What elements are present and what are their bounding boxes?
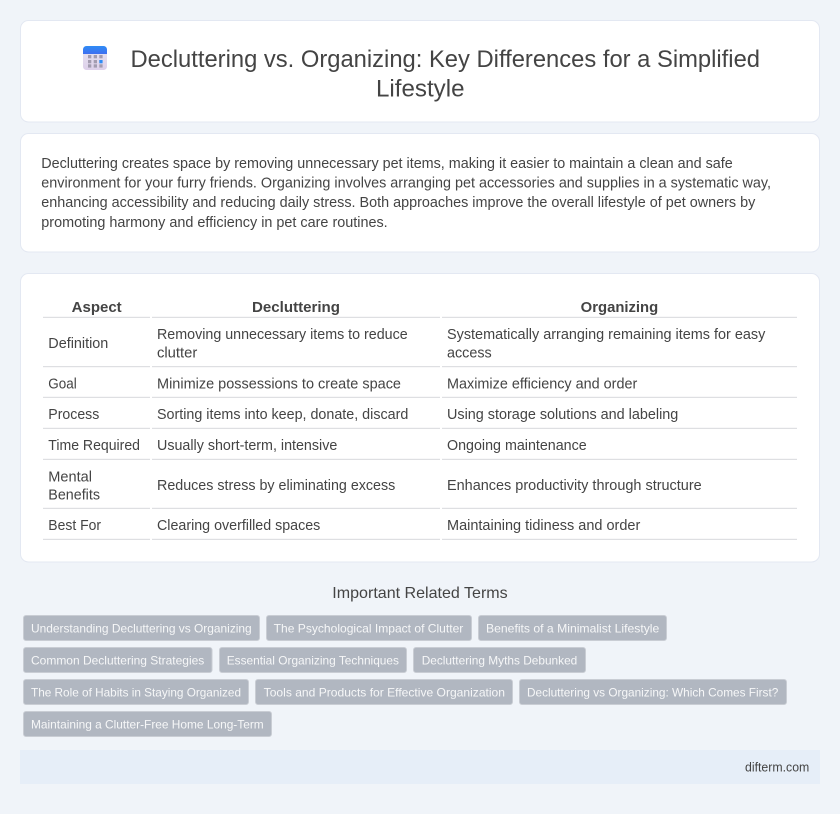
heading: important related terms: Important Related Terms <box>332 585 508 602</box>
row: best for <box>48 518 640 534</box>
tag: The Role of Habits in Staying Organized <box>31 685 241 699</box>
row: time required: Ongoing maintenance <box>447 438 587 454</box>
row: process: Using storage solutions and labeling <box>447 407 678 423</box>
panel: comparison table <box>20 274 820 562</box>
tag <box>24 648 212 672</box>
row: time required: Usually short-term, intensive <box>157 438 337 454</box>
row: definition: Systematically arranging remaining items for easy <box>447 327 766 343</box>
tag: Understanding Decluttering vs Organizing <box>31 621 252 635</box>
row: process <box>48 407 678 423</box>
row: mental benefits: Benefits <box>48 487 100 503</box>
tag <box>256 680 512 704</box>
text block: summary: promoting harmony and efficiency in pet care routines. <box>41 215 388 231</box>
tag: Benefits of a Minimalist Lifestyle <box>486 621 660 635</box>
row: definition: access <box>447 345 492 361</box>
row: goal: Maximize efficiency and order <box>447 376 638 392</box>
row: definition: Definition <box>48 336 108 352</box>
row: mental benefits: Reduces stress by eliminating excess <box>157 478 395 494</box>
table header row <box>72 300 658 316</box>
tag <box>520 680 786 704</box>
table header row: Aspect <box>72 300 122 316</box>
tag: Decluttering vs Organizing: Which Comes First? <box>527 685 779 699</box>
table header row: Organizing <box>581 300 658 316</box>
tag <box>220 648 406 672</box>
row: definition: clutter <box>157 345 197 361</box>
text block: summary <box>41 156 771 231</box>
title: Lifestyle <box>376 76 464 102</box>
row: mental benefits: Mental <box>48 469 92 485</box>
tag: Essential Organizing Techniques <box>227 653 399 667</box>
row: goal: Goal <box>48 376 77 392</box>
row: best for: Maintaining tidiness and order <box>447 518 640 534</box>
tag: Maintaining a Clutter-Free Home Long-Term <box>31 717 264 731</box>
icon: calendar <box>83 46 107 70</box>
tag <box>266 616 472 640</box>
tag <box>24 712 272 736</box>
tag: Tools and Products for Effective Organization <box>264 685 505 699</box>
title: Decluttering vs. Organizing: Key Differences for a Simplified <box>130 46 760 73</box>
tag: Decluttering Myths Debunked <box>422 653 577 667</box>
row: goal: Minimize possessions to create space <box>157 376 401 392</box>
row: definition: Removing unnecessary items to reduce <box>157 327 408 343</box>
table header row: Decluttering <box>252 300 340 316</box>
row: time required <box>48 438 587 454</box>
tag <box>24 680 248 704</box>
footer credit: difterm.com <box>745 759 809 774</box>
title <box>130 46 760 102</box>
tag: Common Decluttering Strategies <box>31 653 204 667</box>
row: process: Sorting items into keep, donate, discard <box>157 407 408 423</box>
panel: summary paragraph <box>20 134 820 252</box>
row: mental benefits <box>48 469 702 503</box>
row: definition <box>48 327 766 361</box>
row: best for: Clearing overfilled spaces <box>157 518 320 534</box>
row: best for: Best For <box>48 518 101 534</box>
footer bar <box>20 750 820 784</box>
text block: summary: environment for your furry friends. Organizing involves arranging pet accessories and supplies in a systematic way, <box>41 176 771 192</box>
row: time required: Time Required <box>48 438 140 454</box>
tag <box>24 616 260 640</box>
text block: summary: enhancing accessibility and reducing daily stress. Both approaches improve the overall lifestyle of pet owners by <box>41 195 756 211</box>
row: goal <box>48 376 638 392</box>
tag list: related terms <box>24 616 786 736</box>
row: process: Process <box>48 407 99 423</box>
row: mental benefits: Enhances productivity through structure <box>447 478 702 494</box>
panel: header <box>20 20 820 122</box>
tag <box>414 648 586 672</box>
tag: The Psychological Impact of Clutter <box>274 621 463 635</box>
tag <box>478 616 666 640</box>
text block: summary: Decluttering creates space by removing unnecessary pet items, making it easier to maintain a clean and safe <box>41 156 733 172</box>
